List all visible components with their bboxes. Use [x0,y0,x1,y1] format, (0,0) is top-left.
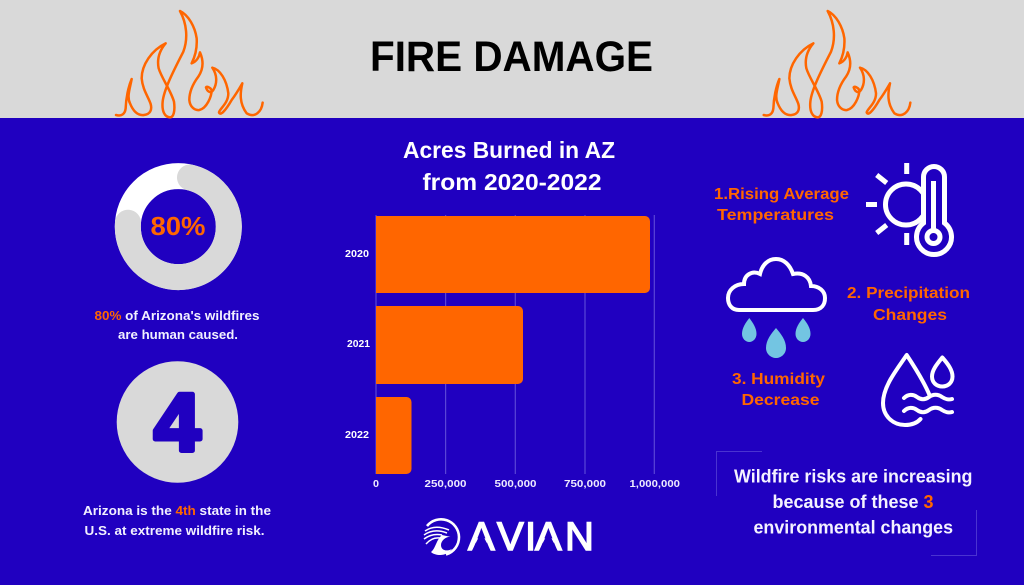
callout: wildfire risks: environmental changes [754,518,953,538]
label: rising temperatures: 1.Rising Average [714,186,849,203]
caption: state rank: Arizona is the 4th state in the [83,503,268,518]
label: humidity: 3. Humidity [732,371,825,388]
wordmark: AVIAN [468,515,594,559]
caption: human caused: 80% of Arizona's wildfires [94,308,255,323]
bar chart [345,215,680,490]
panel: human caused statistic [94,176,263,342]
label: humidity: Decrease [742,392,820,409]
year labels: 2021 [347,339,370,350]
icon: eagle emblem [424,519,459,555]
donut value: 80% [150,211,206,241]
panel: environmental changes [714,163,978,556]
bar: 2021 [376,306,523,384]
label: rising temperatures: Temperatures [717,207,834,224]
axis labels: 500,000 [494,479,537,490]
icon: left flame [116,11,263,117]
caption: human caused: are human caused. [118,327,238,342]
year labels [345,249,370,441]
icon: water drops and waves [883,355,952,425]
axis labels: 250,000 [424,479,467,490]
label: precipitation: 2. Precipitation [847,285,970,302]
icon: rain cloud [728,259,825,358]
axis labels: 0 [373,479,379,490]
bar: 2020 [376,216,650,293]
label: precipitation: Changes [873,307,947,324]
chart title: from 2020-2022 [422,169,602,195]
chart title: Acres Burned in AZ [403,137,615,163]
axis labels: 750,000 [564,479,606,490]
callout: wildfire risks [716,452,978,556]
callout: wildfire risks: Wildfire risks are increasing [734,466,972,486]
icon: right flame [764,11,910,117]
icon: sun and thermometer [866,163,952,254]
panel: acres burned chart [345,137,680,490]
callout: wildfire risks: because of these 3 [772,492,934,512]
caption: state rank: U.S. at extreme wildfire risk. [84,523,264,538]
title: FIRE DAMAGE [370,33,653,81]
axis labels [373,479,680,490]
panel: extreme risk rank [83,361,275,538]
year labels: 2022 [345,430,369,441]
axis labels: 1,000,000 [630,479,680,490]
logo: Avian [424,515,594,559]
year labels: 2020 [345,249,369,260]
badge: number 4 [117,361,238,483]
header band [0,0,1024,118]
badge: number 4: 4 [154,378,201,468]
donut chart: 80 percent [128,176,229,277]
bar: 2022 [376,397,412,474]
